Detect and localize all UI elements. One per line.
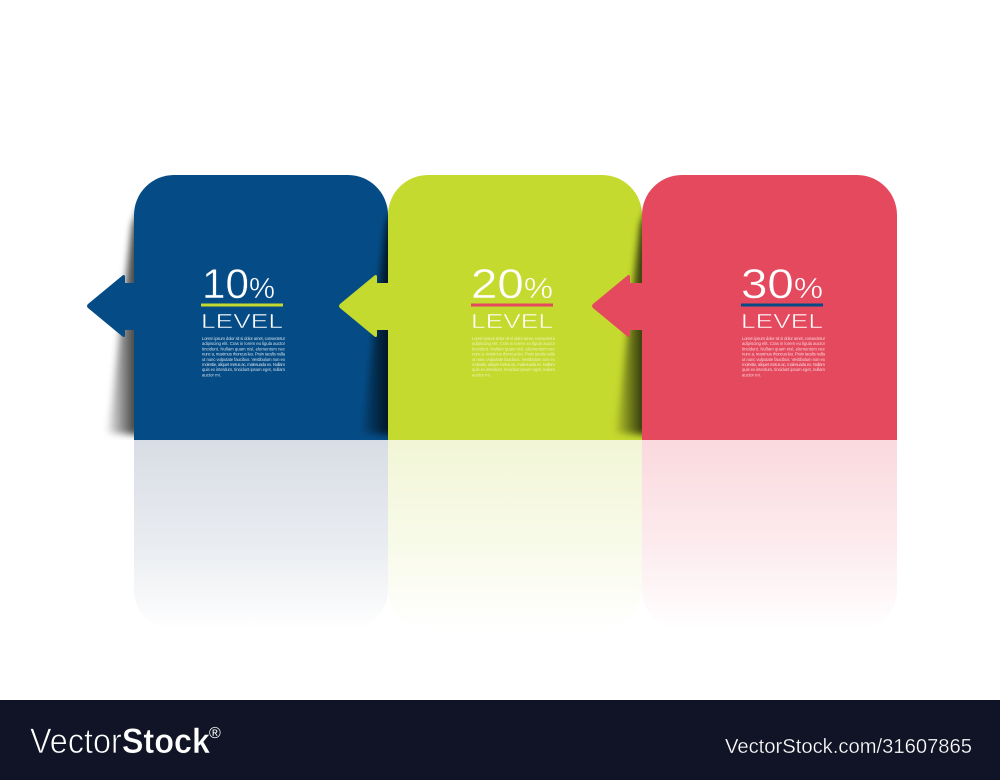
- body text: adipiscing elit. Cras in lorem eu ligula auctor: [742, 341, 826, 346]
- body text: [202, 336, 286, 377]
- body text: quis ex interdum, tincidunt ipsum eget, nullam: [742, 367, 825, 372]
- body text: auctor mi.: [202, 372, 221, 377]
- arrow: blue pointing left: [87, 275, 135, 337]
- shadow behind blue panel: [106, 207, 134, 440]
- reflection: lime panel: [388, 440, 642, 630]
- body text: quis ex interdum, tincidunt ipsum eget, nullam: [472, 367, 555, 372]
- registered mark: ®: [209, 725, 221, 742]
- body text: molestie, aliquet metus ac, malesuada ex. Nullam: [202, 362, 285, 367]
- text block: level 10: [201, 260, 286, 377]
- body text: tincidunt. Nullam quam nisl, elementum nec: [742, 346, 826, 351]
- body text: adipiscing elit. Cras in lorem eu ligula auctor: [202, 341, 286, 346]
- body text: molestie, aliquet metus ac, malesuada ex. Nullam: [742, 362, 825, 367]
- panel: level 20: [339, 175, 642, 440]
- rule: [471, 304, 553, 306]
- reflection: blue panel: [134, 440, 388, 630]
- body text: tincidunt. Nullam quam nisl, elementum nec: [472, 346, 556, 351]
- level label: LEVEL: [741, 311, 823, 333]
- rule: [741, 304, 823, 306]
- body text: tincidunt. Nullam quam nisl, elementum nec: [202, 346, 286, 351]
- infographic canvas: [0, 175, 1000, 780]
- body text: ut nunc vulputate faucibus. Vestibulum non ex: [472, 357, 556, 362]
- panel: level 10: [87, 175, 388, 440]
- shadow on lime panel: [614, 207, 642, 440]
- body text: [742, 336, 826, 377]
- body text: ut nunc vulputate faucibus. Vestibulum non ex: [742, 357, 826, 362]
- percentage 30: 30%: [741, 260, 823, 307]
- body text: ut nunc vulputate faucibus. Vestibulum non ex: [202, 357, 286, 362]
- arrow: red pointing left: [592, 275, 643, 337]
- body text: [472, 336, 556, 377]
- body text: molestie, aliquet metus ac, malesuada ex. Nullam: [472, 362, 555, 367]
- text block: level 30: [741, 260, 826, 377]
- red card: [642, 175, 897, 440]
- body text: quis ex interdum, tincidunt ipsum eget, nullam: [202, 367, 285, 372]
- level label: LEVEL: [201, 311, 283, 333]
- body text: auctor mi.: [472, 372, 491, 377]
- lime card: [388, 175, 642, 440]
- percentage 20: 20%: [471, 260, 553, 307]
- shadow on blue panel: [362, 207, 388, 439]
- level label: LEVEL: [471, 311, 553, 333]
- body text: nunc a, maximus rhoncus leo. Proin iaculis nulla: [742, 352, 826, 357]
- blue card: [134, 175, 388, 440]
- body text: Lorem ipsum dolor sit si dolor amet, consectetur: [742, 336, 826, 341]
- body text: nunc a, maximus rhoncus leo. Proin iaculis nulla: [202, 352, 286, 357]
- panel: level 30: [592, 175, 897, 440]
- percentage 10: 10%: [202, 260, 275, 307]
- footer bar: [0, 700, 1000, 780]
- reflection: red panel: [642, 440, 897, 630]
- text block: level 20: [471, 260, 556, 377]
- footer image id: VectorStock.com/31607865: [725, 736, 972, 758]
- footer logo: VectorStock: [30, 722, 210, 761]
- rule: [201, 304, 283, 306]
- body text: Lorem ipsum dolor sit si dolor amet, consectetur: [472, 336, 556, 341]
- body text: Lorem ipsum dolor sit si dolor amet, consectetur: [202, 336, 286, 341]
- body text: nunc a, maximus rhoncus leo. Proin iaculis nulla: [472, 352, 556, 357]
- body text: auctor mi.: [742, 372, 761, 377]
- arrow: lime pointing left: [339, 275, 389, 337]
- body text: adipiscing elit. Cras in lorem eu ligula auctor: [472, 341, 556, 346]
